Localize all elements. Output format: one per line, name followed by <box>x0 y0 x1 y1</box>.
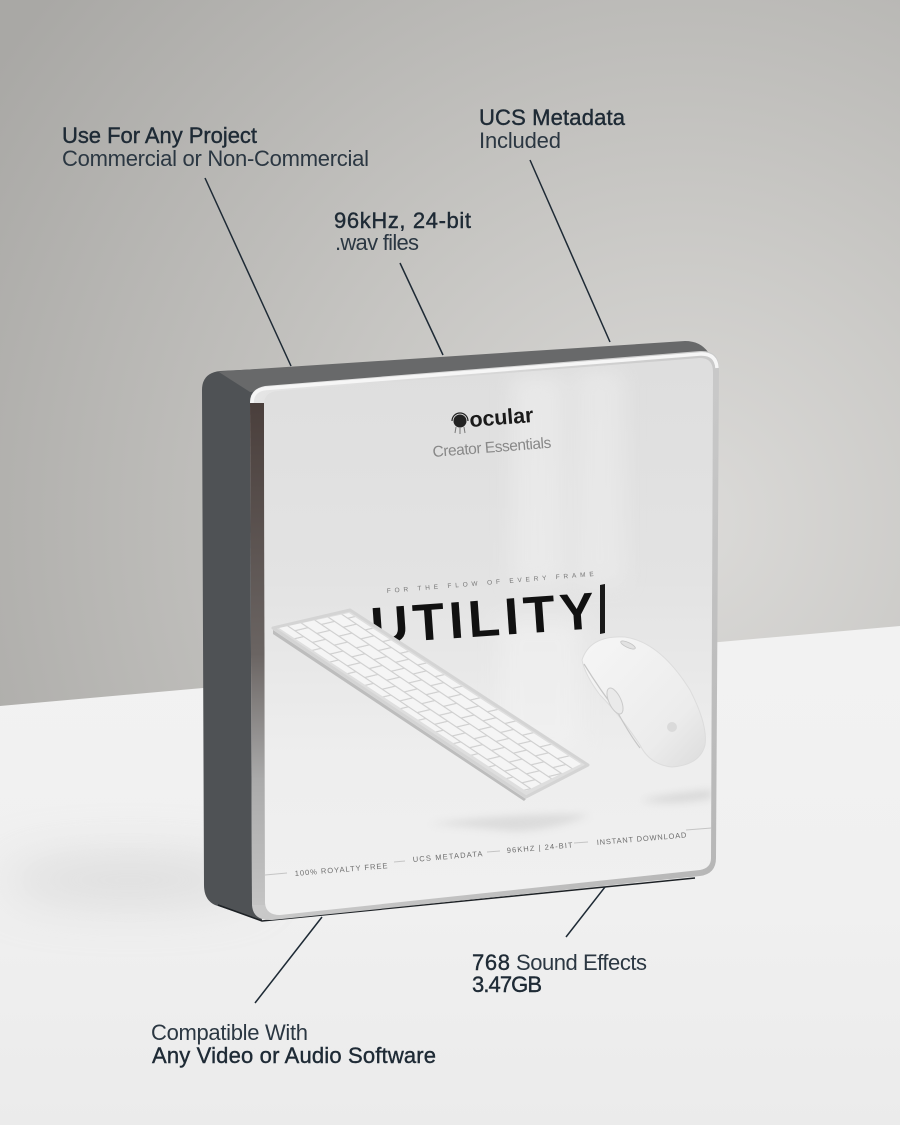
bottom contact shadow <box>218 878 695 921</box>
utility title: UTILITY <box>369 582 596 656</box>
callout: use for any project: Use For Any Project <box>62 123 257 148</box>
top highlight of frame <box>252 354 717 403</box>
logo wordmark: ocular <box>469 403 535 432</box>
metal frame <box>250 351 719 920</box>
background wall <box>0 0 900 720</box>
callout: wav files <box>334 208 471 355</box>
callout: compatibility: Compatible With <box>151 1020 308 1045</box>
floating shadows <box>430 790 712 831</box>
text cursor <box>600 584 605 634</box>
callout: sound effects: 768 <box>472 950 510 975</box>
footer strip: UCS METADATA <box>412 849 484 864</box>
keyboard <box>273 610 588 801</box>
callout: ucs metadata: Included <box>479 128 561 153</box>
box side <box>202 369 262 921</box>
callout: wav files: .wav files <box>335 230 419 255</box>
panel contents <box>265 370 712 878</box>
footer strip <box>265 828 712 878</box>
callout: sound effects <box>472 887 647 997</box>
floor <box>0 626 900 1125</box>
footer strip: INSTANT DOWNLOAD <box>596 830 688 847</box>
callout: compatibility: Any Video or Audio Software <box>152 1043 436 1068</box>
callout: sound effects: Sound Effects <box>516 950 647 975</box>
callout: use for any project: Commercial or Non-Commercial <box>62 146 369 171</box>
window reflection <box>522 384 610 490</box>
callout: compatibility <box>151 917 436 1068</box>
frame left edge <box>250 403 265 905</box>
footer strip: 96KHZ | 24-BIT <box>506 840 574 855</box>
logo subtitle: Creator Essentials <box>432 435 552 461</box>
callout: ucs metadata <box>479 105 626 342</box>
front panel <box>264 358 713 915</box>
utility tagline: FOR THE FLOW OF EVERY FRAME <box>387 571 598 595</box>
callout: sound effects: 3.47GB <box>472 972 542 997</box>
mouse <box>582 637 705 767</box>
footer strip: 100% ROYALTY FREE <box>294 861 389 878</box>
box top face <box>218 341 708 392</box>
product box <box>202 341 719 921</box>
logo icon <box>452 413 468 434</box>
callout: ucs metadata: UCS Metadata <box>479 105 626 130</box>
callout: wav files: 96kHz, 24-bit <box>334 208 471 233</box>
callout: use for any project <box>62 123 369 366</box>
